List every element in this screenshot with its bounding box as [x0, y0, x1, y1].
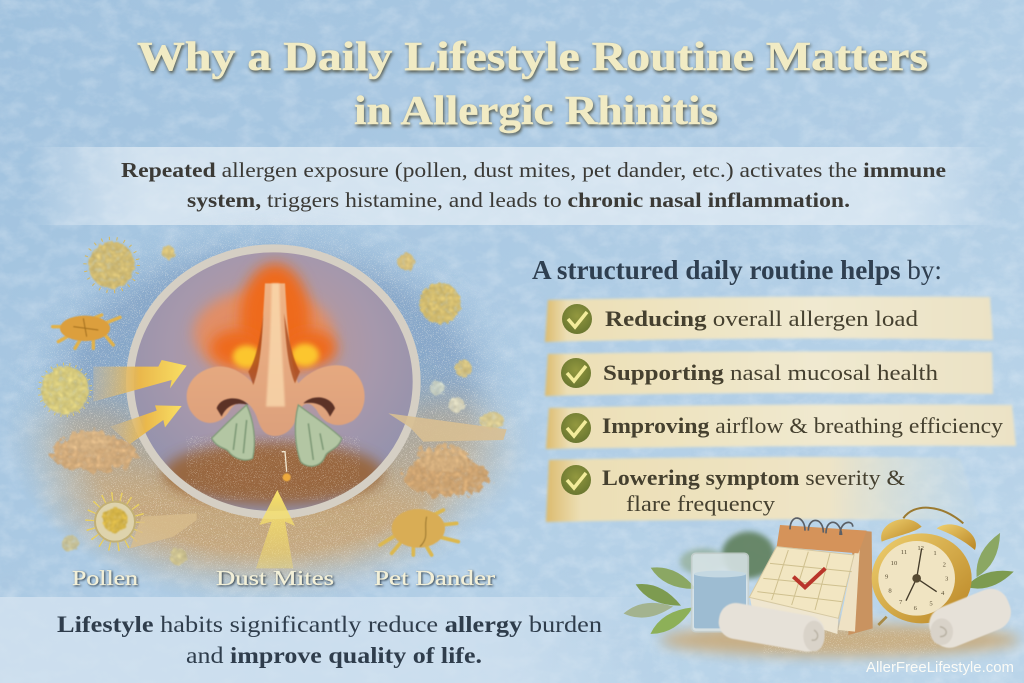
benefit 4 [546, 457, 980, 522]
title [137, 33, 928, 133]
title: in Allergic Rhinitis [354, 87, 718, 133]
icon: alarm clock: 1 [933, 550, 937, 557]
icon: rolled towels [716, 583, 1016, 654]
icon: check [561, 413, 591, 443]
footer text: and improve quality of life. [186, 643, 482, 669]
intro text [121, 158, 946, 212]
icon: alarm clock: 4 [941, 590, 945, 597]
icon: alarm clock: 8 [888, 588, 892, 595]
icon: alarm clock: 9 [885, 573, 889, 580]
arrow: to nose upper [93, 360, 187, 402]
icon: alarm clock: 5 [929, 601, 933, 608]
benefit 3 [546, 404, 1016, 449]
label: Pollen: Pollen [72, 566, 139, 590]
inflamed tissue [193, 263, 337, 377]
arrow: bottom yellow [256, 490, 295, 568]
arrow: lower left tan [130, 513, 197, 548]
panel: intro band [30, 147, 994, 225]
footer text [57, 612, 602, 669]
arrow: to nose lower [110, 405, 182, 444]
panel: daily routine objects [623, 508, 1020, 657]
icon: alarm clock [872, 508, 976, 625]
benefit 4: Lowering symptom severity & [602, 465, 906, 490]
icon: alarm clock: 11 [901, 549, 907, 556]
icons: pollen grains [39, 238, 504, 565]
icon: alarm clock: 6 [914, 605, 918, 612]
panel: benefit list [545, 296, 1016, 522]
icon: check [561, 465, 591, 495]
arrow: right tan [388, 413, 507, 442]
icon: check [561, 358, 591, 388]
icon: alarm clock: 7 [899, 599, 903, 606]
benefit 1: Reducing overall allergen load [605, 306, 918, 331]
icon: check [562, 304, 592, 334]
label: Pet Dander: Pet Dander [374, 566, 495, 590]
heading: routine helps: A structured daily routine helps by: [532, 255, 942, 285]
panel: footer band [0, 597, 660, 683]
droplet [282, 452, 291, 481]
watermark: AllerFreeLifestyle.com [866, 660, 1014, 676]
icon: alarm clock: 3 [945, 576, 949, 583]
benefit 2: Supporting nasal mucosal health [603, 360, 938, 385]
icon: alarm clock: 12 [917, 545, 924, 552]
icons: dust piles [50, 430, 490, 497]
benefit 1 [545, 296, 993, 342]
footer text: Lifestyle habits significantly reduce allergy burden [57, 612, 602, 638]
label: Dust Mites: Dust Mites [216, 566, 334, 590]
icon: leaves [623, 530, 1016, 640]
title: Why a Daily Lifestyle Routine Matters [137, 33, 928, 79]
icon: water glass [692, 553, 748, 632]
icon: alarm clock: 2 [943, 562, 946, 569]
benefit 3: Improving airflow & breathing efficiency [602, 413, 1004, 438]
icons: dust mites [53, 315, 458, 555]
intro text: system, triggers histamine, and leads to chronic nasal inflammation. [187, 188, 850, 212]
nasal circle [130, 248, 417, 515]
mucus [212, 405, 342, 466]
panel: allergen illustration [9, 210, 529, 597]
benefit 4: flare frequency [626, 491, 776, 516]
icon: calendar [749, 518, 873, 635]
benefit 2 [545, 351, 993, 396]
icon: alarm clock: 10 [891, 560, 898, 567]
intro text: Repeated allergen exposure (pollen, dust mites, pet dander, etc.) activates the immune [121, 158, 946, 182]
nose [187, 283, 365, 436]
